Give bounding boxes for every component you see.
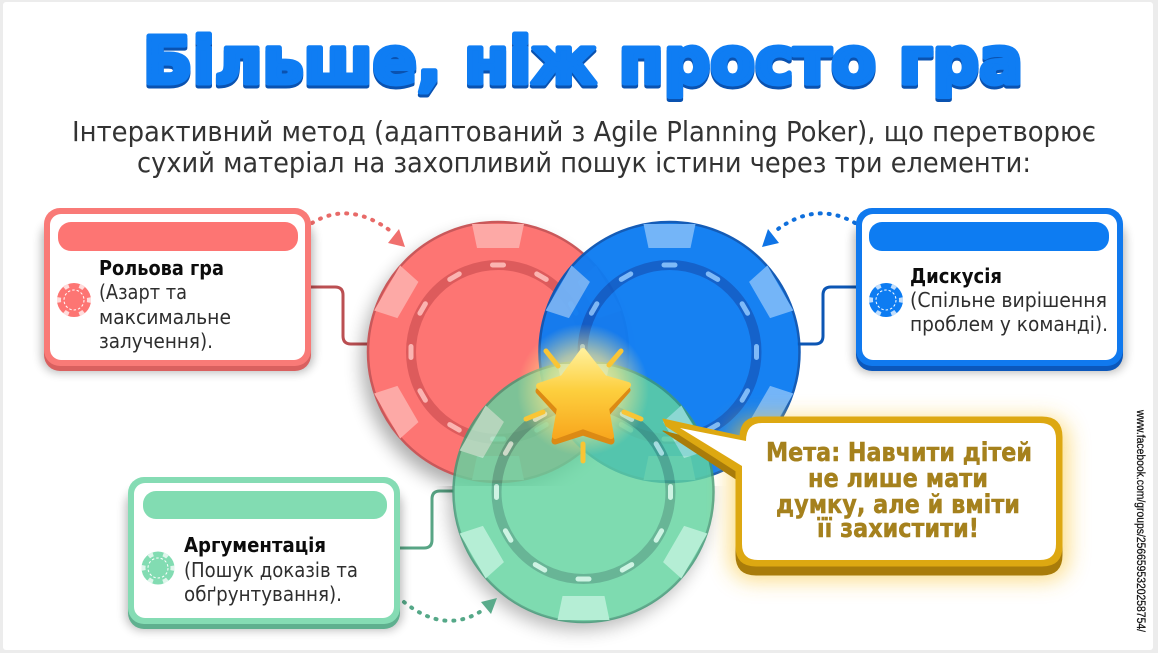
icon: star with rays bbox=[526, 351, 641, 461]
text bbox=[910, 264, 1108, 336]
blue connector bbox=[797, 287, 857, 344]
blue dotted arrow bbox=[762, 213, 855, 247]
text bbox=[99, 256, 231, 353]
text: (Пошук доказів та bbox=[184, 558, 358, 582]
icon: mini chip bbox=[142, 552, 174, 584]
callout: goal bbox=[663, 417, 1068, 580]
green dotted arrow bbox=[404, 598, 497, 621]
panel: discussion bbox=[854, 208, 1125, 372]
title: Більше, ніж просто гра bbox=[143, 25, 1023, 99]
title: Більше, ніж просто гра bbox=[143, 28, 1023, 102]
chip: green bbox=[449, 362, 714, 630]
header bar bbox=[143, 491, 387, 519]
subtitle: Інтерактивний метод (адаптований з Agile Planning Poker), що перетворює bbox=[72, 115, 1096, 148]
text: Дискусія bbox=[910, 264, 1002, 288]
chip: red bbox=[362, 222, 628, 492]
chip: blue bbox=[540, 222, 800, 482]
panel: role play bbox=[42, 208, 313, 372]
callout text: її захистити! bbox=[817, 514, 979, 544]
green connector bbox=[400, 491, 455, 548]
text: Рольова гра bbox=[99, 256, 224, 280]
text: (Спільне вирішення bbox=[910, 288, 1107, 312]
red connector bbox=[311, 287, 369, 344]
text: Аргументація bbox=[184, 533, 326, 557]
text bbox=[184, 533, 358, 606]
text: залучення). bbox=[99, 329, 213, 353]
red dotted arrow bbox=[312, 213, 405, 247]
text: проблем у команді). bbox=[910, 312, 1108, 336]
subtitle: сухий матеріал на захопливий пошук істини через три елементи: bbox=[137, 146, 1031, 179]
icon: mini chip bbox=[869, 283, 903, 317]
callout text bbox=[766, 438, 1032, 544]
text: максимальне bbox=[99, 305, 231, 329]
subtitle bbox=[72, 115, 1096, 179]
header bar bbox=[869, 222, 1109, 251]
panel: argumentation bbox=[126, 477, 402, 630]
icon: mini chip bbox=[57, 283, 91, 317]
header bar bbox=[58, 222, 298, 251]
text: обґрунтування). bbox=[184, 582, 342, 606]
callout text: думку, але й вміти bbox=[776, 490, 1020, 520]
callout text: не лише мати bbox=[808, 464, 988, 494]
callout text: Мета: Навчити дітей bbox=[766, 438, 1032, 468]
star glow bbox=[517, 324, 649, 456]
text: (Азарт та bbox=[99, 280, 187, 304]
